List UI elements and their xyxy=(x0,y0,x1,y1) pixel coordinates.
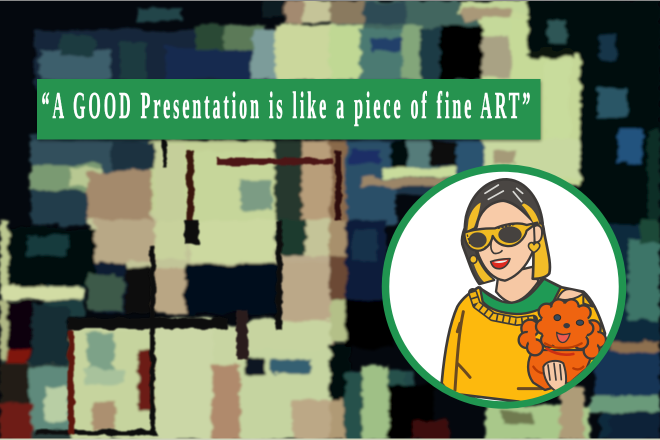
dog ear fill xyxy=(527,330,598,346)
dog collar xyxy=(547,349,573,355)
face xyxy=(476,199,535,281)
dog nose xyxy=(563,323,570,328)
quote text: “A GOOD Presentation is like a piece of fine ART” xyxy=(42,85,530,127)
lower-right xyxy=(628,240,660,320)
left earring xyxy=(470,255,477,263)
hand xyxy=(543,361,566,392)
dog xyxy=(519,299,606,392)
nose xyxy=(491,239,502,254)
sunglasses xyxy=(464,223,537,251)
sleeve fold xyxy=(455,312,542,390)
dog head xyxy=(536,299,593,349)
dark painted strokes xyxy=(35,140,341,435)
lower-middle xyxy=(330,220,346,256)
dog face fill xyxy=(541,304,589,348)
dog ears xyxy=(519,320,606,359)
badge ring xyxy=(386,168,622,405)
top-middle xyxy=(330,0,364,24)
ear xyxy=(534,225,542,242)
quote banner xyxy=(37,79,541,141)
underpainting xyxy=(35,30,265,90)
back hair right xyxy=(533,217,550,279)
neck xyxy=(496,267,538,303)
under the banner, left xyxy=(30,140,112,190)
illustrated woman with dog xyxy=(442,179,606,405)
back hair left xyxy=(462,217,494,284)
collar ribbing xyxy=(473,293,533,321)
top-left dark zone xyxy=(40,50,110,82)
earrings xyxy=(528,243,540,253)
sweater xyxy=(442,278,605,405)
portrait badge xyxy=(386,168,622,405)
shoulder xyxy=(557,289,584,300)
dog tongue xyxy=(557,332,570,343)
dog body xyxy=(528,350,594,390)
green top xyxy=(480,279,561,314)
middle-left band xyxy=(0,220,8,290)
hair top xyxy=(465,179,543,233)
right dark zone xyxy=(580,0,660,225)
dog eyes xyxy=(554,315,561,321)
mouth xyxy=(491,259,510,269)
lower-left panels xyxy=(73,330,153,432)
under the banner, middle xyxy=(330,140,346,220)
